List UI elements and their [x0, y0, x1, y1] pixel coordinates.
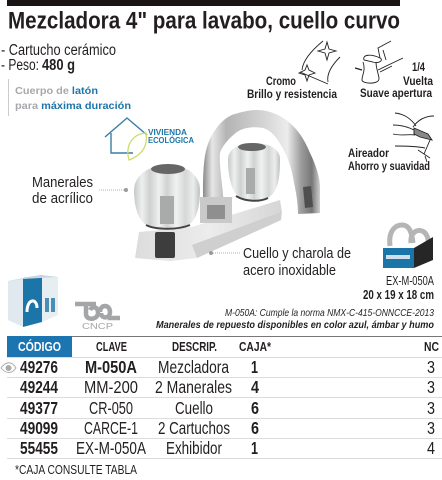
icon: quarter turn hand [355, 41, 403, 83]
row 49244 [20, 377, 435, 397]
row 49244: 3 [427, 377, 435, 397]
table footnote: *CAJA CONSULTE TABLA [15, 462, 137, 477]
feature list: - Cartucho cerámico [1, 42, 116, 59]
leader: handles [99, 188, 128, 192]
row 55455: 4 [427, 438, 435, 458]
row 49276: Mezcladora [158, 357, 229, 377]
callout: body material [8, 79, 131, 116]
right handle [228, 143, 280, 201]
label: quarter turn [360, 60, 433, 100]
icon: aerator hands [393, 113, 434, 162]
package box image [8, 275, 58, 327]
feature list: 480 g [42, 57, 75, 74]
row 49099: 2 Cartuchos [158, 418, 230, 438]
row 55455: 1 [251, 438, 258, 458]
header code cell [7, 336, 72, 357]
row 49276: M-050A [85, 357, 137, 377]
row 49244: MM-200 [84, 377, 138, 397]
display box image [383, 225, 433, 268]
faucet base [135, 200, 282, 261]
label: acrylic handles [32, 174, 93, 207]
header row: NC [424, 340, 439, 354]
row 49377: Cuello [175, 398, 213, 418]
label: neck and tray: Cuello y charola de [243, 245, 351, 262]
label: neck and tray: acero inoxidable [243, 262, 336, 279]
icon: eco housing logo [105, 118, 194, 160]
row rules [7, 357, 442, 459]
row 49276 [20, 357, 435, 377]
display box size [363, 274, 434, 302]
row 49099: 49099 [20, 418, 58, 438]
row 49377: 49377 [20, 398, 58, 418]
top black bar [7, 0, 400, 6]
label: aerator [348, 146, 430, 173]
row 55455: 55455 [20, 438, 58, 458]
label: neck and tray [243, 245, 351, 279]
label: aerator: Aireador [348, 146, 389, 160]
row 49377: 3 [427, 398, 435, 418]
feature list: - Peso: [1, 57, 39, 74]
label: acrylic handles: Manerales [32, 174, 93, 191]
faucet photo [134, 110, 320, 261]
row 49377: CR-050 [89, 398, 133, 418]
row 49244: 2 Manerales [155, 377, 232, 397]
row 49099: CARCE-1 [84, 418, 138, 438]
row 49276: 1 [251, 357, 258, 377]
row 49276: 3 [427, 357, 435, 377]
row 49377: 6 [251, 398, 259, 418]
header row: CLAVE [96, 340, 127, 354]
row 49276: 49276 [20, 357, 58, 377]
callout: body material: Cuerpo de latón [15, 85, 98, 97]
compliance notes [156, 307, 435, 331]
row 49099: 6 [251, 418, 259, 438]
label: quarter turn: Vuelta [403, 74, 433, 88]
icon: eco housing logo: VIVIENDA [148, 127, 187, 137]
left handle [134, 164, 200, 229]
icon: eco housing logo: ECOLÓGICA [148, 134, 194, 145]
icon: chrome shine [299, 41, 340, 84]
label: chrome [247, 74, 337, 101]
leader: neck [209, 251, 241, 255]
row 49099: 3 [427, 418, 435, 438]
faucet spout [203, 110, 320, 214]
label: chrome: Brillo y resistencia [247, 87, 337, 101]
label: acrylic handles: de acrílico [32, 190, 93, 207]
row 55455: EX-M-050A [76, 438, 146, 458]
CNCP logo [75, 304, 120, 331]
icon: eye [1, 363, 16, 372]
callout: body material: para máxima duración [15, 100, 131, 112]
row 49377 [20, 398, 435, 418]
product table [1, 336, 442, 459]
CNCP logo: CNCP [82, 321, 113, 331]
label: quarter turn: 1/4 [412, 60, 425, 74]
table top rule [7, 336, 442, 337]
label: chrome: Cromo [266, 74, 296, 88]
header row: CAJA* [239, 340, 271, 354]
row 55455 [20, 438, 435, 458]
header row [18, 339, 439, 354]
row 49244: 4 [251, 377, 259, 397]
row 49099 [20, 418, 435, 438]
header row: DESCRIP. [172, 340, 217, 354]
row 55455: Exhibidor [166, 438, 222, 458]
feature list [1, 42, 116, 74]
row 49244: 49244 [20, 377, 58, 397]
header row: CÓDIGO [18, 339, 61, 354]
